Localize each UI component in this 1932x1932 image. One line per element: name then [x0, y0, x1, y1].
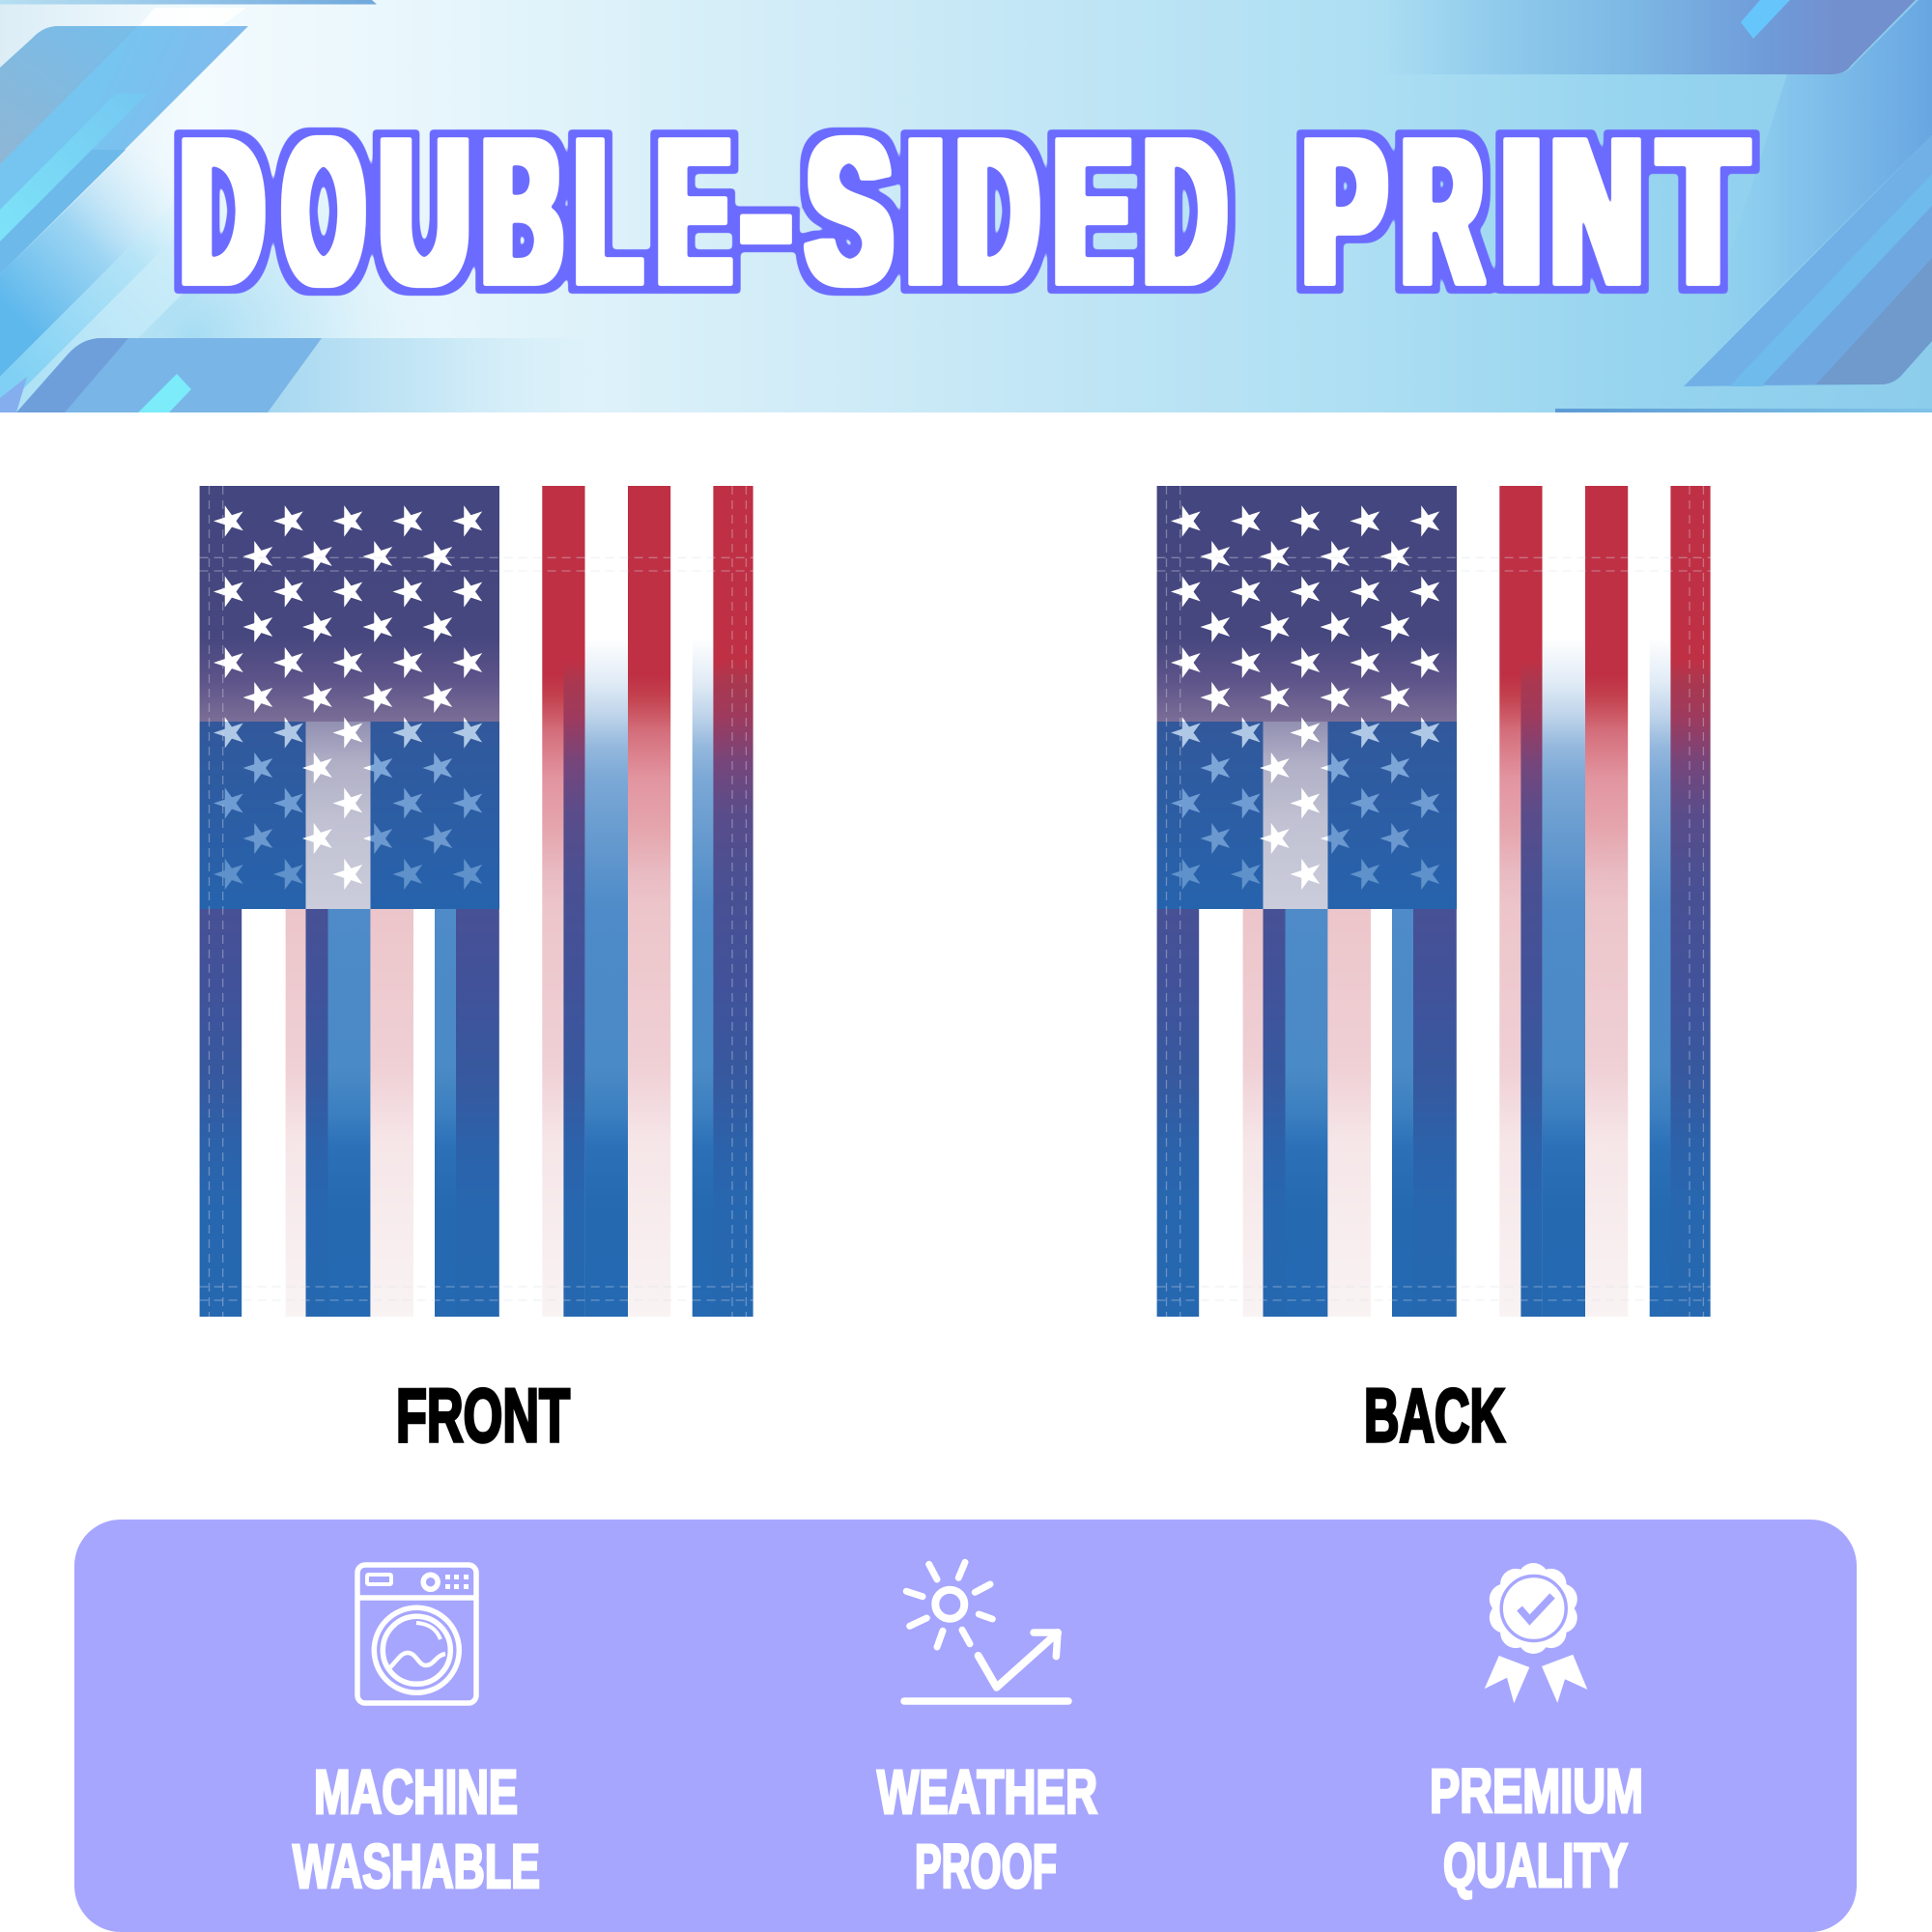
title: - [741, 95, 791, 327]
flag canton [200, 486, 499, 909]
title: D [1144, 95, 1226, 327]
title: B [483, 95, 562, 327]
title: D [956, 95, 1038, 327]
text: weather proof [877, 1757, 1097, 1901]
title: N [1551, 95, 1643, 327]
flag stitching [200, 486, 753, 1317]
title: R [1403, 95, 1482, 327]
title: D [181, 95, 264, 327]
title: I [905, 95, 946, 327]
title: I [1499, 95, 1544, 327]
flag stars lower [213, 717, 482, 890]
panel: features [74, 1520, 1857, 1932]
text: premium quality: PREMIUM [1430, 1756, 1643, 1826]
title [181, 95, 1747, 327]
text: premium quality: QUALITY [1443, 1831, 1628, 1900]
flag: front [200, 486, 753, 1317]
text: machine washable: WASHABLE [293, 1832, 540, 1901]
flag stars upper [213, 505, 482, 713]
text: weather proof: PROOF [915, 1832, 1057, 1901]
flag right stripes [542, 486, 753, 1317]
title: T [1660, 95, 1747, 327]
text: weather proof: WEATHER [877, 1757, 1097, 1827]
icon: quality ribbon [1485, 1563, 1587, 1703]
title: P [1303, 95, 1386, 327]
title: E [658, 95, 730, 327]
header banner [0, 0, 1932, 412]
title: O [284, 95, 363, 327]
title: E [1054, 95, 1132, 327]
text: premium quality [1430, 1756, 1643, 1900]
title: L [576, 95, 640, 327]
title: U [380, 95, 469, 327]
flag lower stripes [200, 909, 499, 1317]
icon: sun weather [904, 1562, 1068, 1701]
title: S [807, 95, 892, 327]
text: machine washable [293, 1757, 540, 1901]
text: machine washable: MACHINE [314, 1757, 518, 1827]
flag: back [1157, 486, 1711, 1317]
label: back: BACK [1364, 1373, 1505, 1458]
label: front: FRONT [396, 1373, 570, 1458]
icon: washing machine [357, 1565, 476, 1703]
